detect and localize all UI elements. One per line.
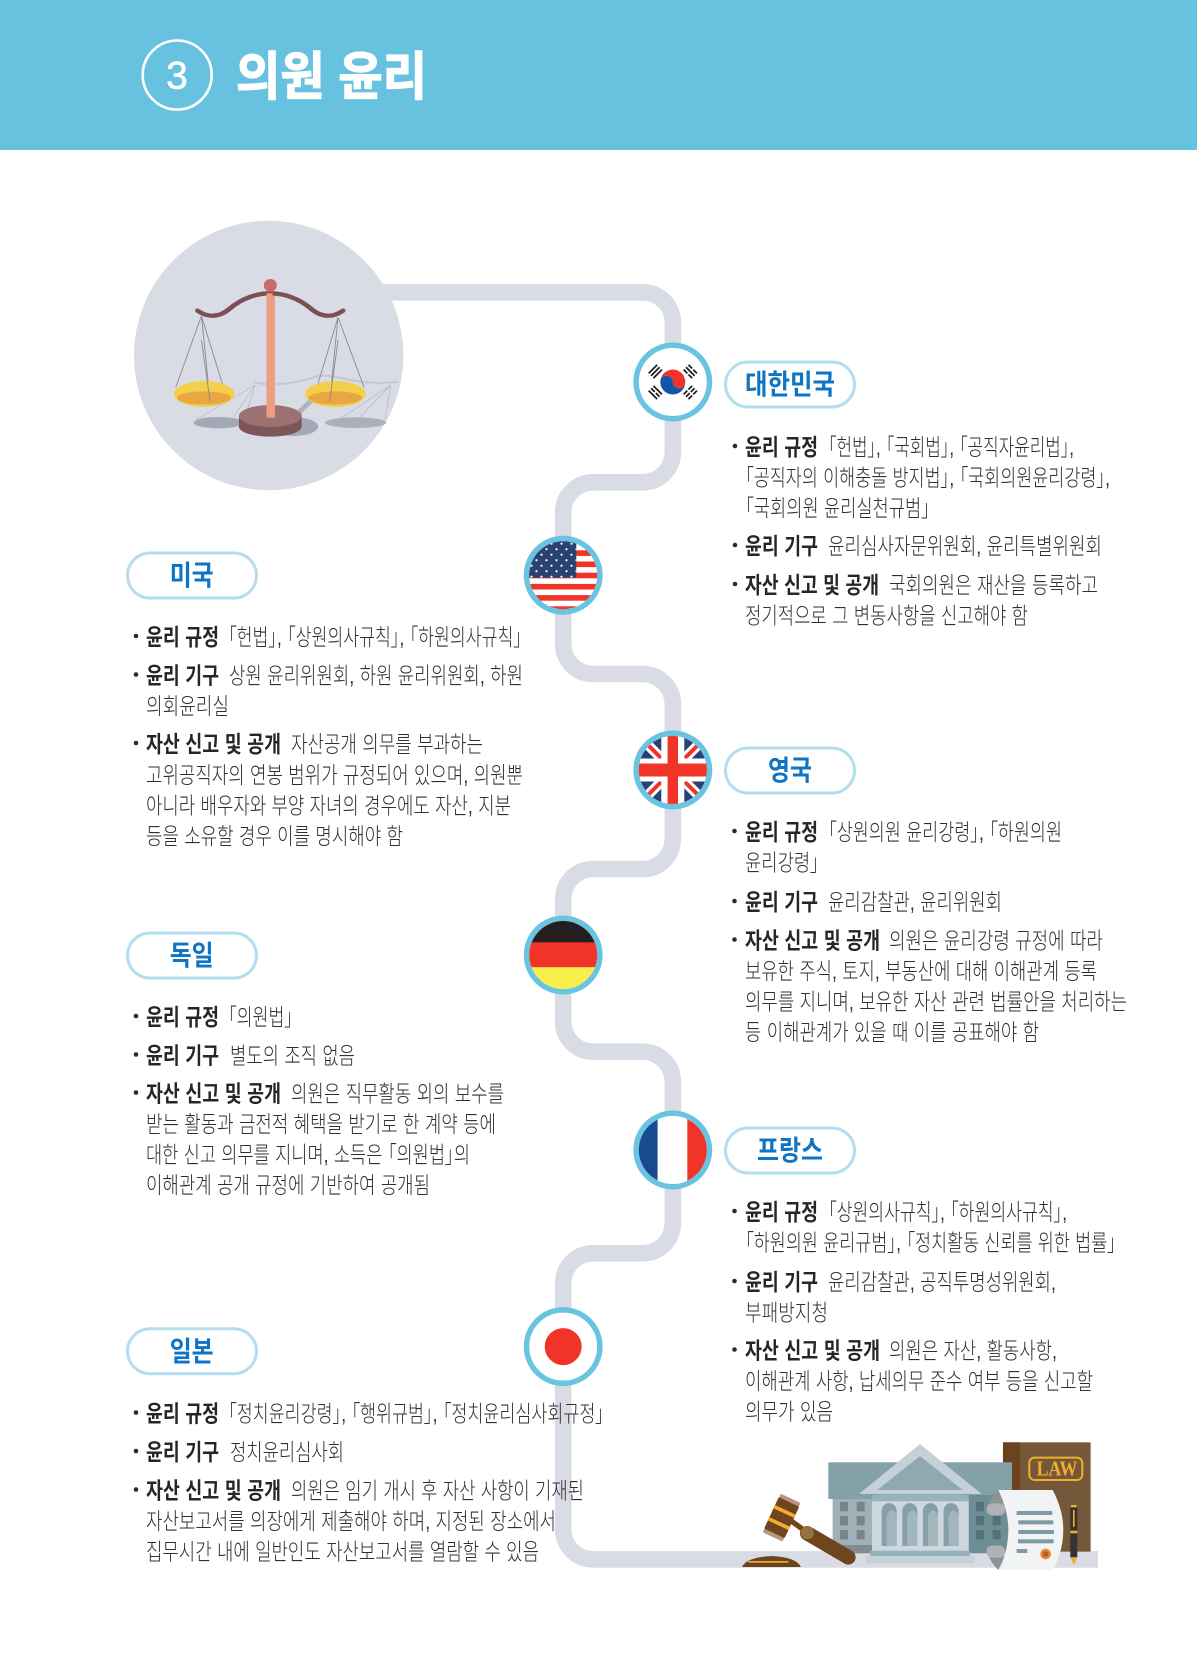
text block: 프랑스: 자산 신고 및 공개	[745, 1338, 880, 1364]
text block: 독일: 이해관계 공개 규정에 기반하여 공개됨	[146, 1172, 430, 1198]
text block: 대한민국: 윤리 기구	[745, 533, 818, 559]
label: 독일: 독일	[170, 940, 214, 971]
text block: 미국: 고위공직자의 연봉 범위가 규정되어 있으며, 의원뿐	[146, 762, 523, 788]
text block: 대한민국: 국회의원은 재산을 등록하고	[889, 572, 1098, 598]
title: 의원 윤리	[236, 49, 427, 107]
icon: Korean flag	[636, 345, 710, 419]
section number badge	[143, 40, 212, 110]
label: 대한민국: 대한민국	[745, 369, 835, 400]
courthouse	[828, 1444, 1012, 1564]
text block: 대한민국	[733, 434, 1110, 628]
label: 프랑스: 프랑스	[757, 1135, 823, 1166]
label: 영국: 영국	[768, 755, 812, 786]
label: 독일	[128, 933, 256, 978]
icon: scales of justice	[134, 221, 403, 490]
text block: 독일: 받는 활동과 금전적 혜택을 받기로 한 계약 등에	[146, 1111, 496, 1137]
text block: 프랑스: 의무가 있음	[745, 1398, 833, 1424]
icon: UK flag	[636, 733, 710, 807]
text block: 프랑스	[732, 1199, 1116, 1424]
icon: French flag	[636, 1113, 711, 1187]
section number badge: 3	[166, 54, 188, 98]
scroll	[987, 1490, 1063, 1570]
text block: 독일: 의원은 직무활동 외의 보수를	[291, 1080, 504, 1106]
text block: 미국: 상원 윤리위원회, 하원 윤리위원회, 하원	[229, 662, 523, 688]
text block: 프랑스: 부패방지청	[745, 1300, 828, 1326]
text block: 독일: 「의원법」	[228, 1004, 293, 1030]
text block: 일본: 정치윤리심사회	[230, 1439, 344, 1465]
label: 미국	[128, 553, 256, 598]
text block: 일본: 의원은 임기 개시 후 자산 사항이 기재된	[291, 1478, 584, 1504]
text block: 독일: 별도의 조직 없음	[230, 1042, 355, 1068]
gavel	[742, 1493, 848, 1567]
label: 미국: 미국	[170, 560, 214, 591]
text block: 영국: 의원은 윤리강령 규정에 따라	[889, 928, 1103, 954]
text block: 프랑스: 윤리감찰관, 공직투명성위원회,	[828, 1269, 1056, 1295]
text block: 영국: 윤리 규정	[745, 819, 818, 845]
text block: 대한민국: 「국회의원 윤리실천규범」	[745, 495, 930, 521]
text block: 독일: 자산 신고 및 공개	[146, 1080, 281, 1106]
text block: 대한민국: 「헌법」, 「국회법」, 「공직자윤리법」,	[828, 434, 1074, 460]
label: 일본	[128, 1329, 256, 1374]
text block: 일본: 윤리 규정	[146, 1400, 219, 1426]
text block: 영국: 「상원의원 윤리강령」, 「하원의원	[828, 819, 1062, 845]
text block: 영국: 윤리강령」	[745, 850, 819, 876]
label: 대한민국	[726, 362, 854, 407]
pen	[1070, 1505, 1077, 1565]
text block: 영국: 윤리감찰관, 윤리위원회	[828, 889, 1002, 915]
law book: LAW	[1037, 1458, 1078, 1480]
text block: 일본: 자산보고서를 의장에게 제출해야 하며, 지정된 장소에서	[146, 1508, 556, 1534]
text block: 영국: 보유한 주식, 토지, 부동산에 대해 이해관계 등록	[745, 958, 1097, 984]
text block: 미국: 의회윤리실	[146, 693, 229, 719]
icon: German flag	[526, 918, 600, 992]
text block: 미국	[134, 624, 523, 849]
connector path	[370, 292, 1098, 1559]
text block: 영국: 윤리 기구	[745, 889, 818, 915]
icon: Japanese flag	[526, 1310, 600, 1383]
text block: 프랑스: 윤리 규정	[745, 1199, 818, 1225]
label: 일본: 일본	[170, 1336, 214, 1367]
text block: 일본	[134, 1400, 604, 1564]
text block: 프랑스: 의원은 자산, 활동사항,	[889, 1338, 1057, 1364]
text block: 일본: 집무시간 내에 일반인도 자산보고서를 열람할 수 있음	[146, 1538, 539, 1564]
text block: 미국: 윤리 기구	[146, 662, 219, 688]
text block: 독일: 윤리 기구	[146, 1042, 219, 1068]
law book	[1003, 1442, 1091, 1552]
text block: 일본: 윤리 기구	[146, 1439, 219, 1465]
text block: 미국: 아니라 배우자와 부양 자녀의 경우에도 자산, 지분	[146, 792, 511, 818]
text block: 독일	[134, 1004, 504, 1198]
text block: 일본: 자산 신고 및 공개	[146, 1478, 281, 1504]
text block: 영국: 자산 신고 및 공개	[745, 928, 880, 954]
text block: 프랑스: 이해관계 사항, 납세의무 준수 여부 등을 신고할	[745, 1368, 1093, 1394]
text block: 독일: 대한 신고 의무를 지니며, 소득은 「의원법」의	[146, 1142, 470, 1168]
text block: 일본: 「정치윤리강령」, 「행위규범」, 「정치윤리심사회규정」	[228, 1400, 604, 1426]
text block: 미국: 「헌법」, 「상원의사규칙」, 「하원의사규칙」	[228, 624, 522, 650]
text block: 독일: 윤리 규정	[146, 1004, 219, 1030]
text block: 대한민국: 자산 신고 및 공개	[745, 572, 879, 598]
label: 프랑스	[726, 1128, 854, 1173]
text block: 미국: 등을 소유할 경우 이를 명시해야 함	[146, 823, 403, 849]
text block: 프랑스: 「상원의사규칙」, 「하원의사규칙」,	[828, 1199, 1067, 1225]
text block: 미국: 윤리 규정	[146, 624, 219, 650]
header band	[0, 0, 1197, 150]
text block: 프랑스: 윤리 기구	[745, 1269, 818, 1295]
label: 영국	[726, 748, 854, 793]
illustration: courthouse, gavel, law book and scroll	[742, 1442, 1091, 1570]
text block: 영국	[732, 819, 1127, 1045]
text block: 미국: 자산공개 의무를 부과하는	[291, 731, 483, 757]
text block: 영국: 등 이해관계가 있을 때 이를 공표해야 함	[745, 1019, 1039, 1045]
text block: 대한민국: 윤리 규정	[745, 434, 818, 460]
icon: US flag	[526, 538, 600, 612]
text block: 대한민국: 정기적으로 그 변동사항을 신고해야 함	[745, 602, 1028, 628]
text block: 대한민국: 윤리심사자문위원회, 윤리특별위원회	[828, 533, 1102, 559]
text block: 미국: 자산 신고 및 공개	[146, 731, 281, 757]
